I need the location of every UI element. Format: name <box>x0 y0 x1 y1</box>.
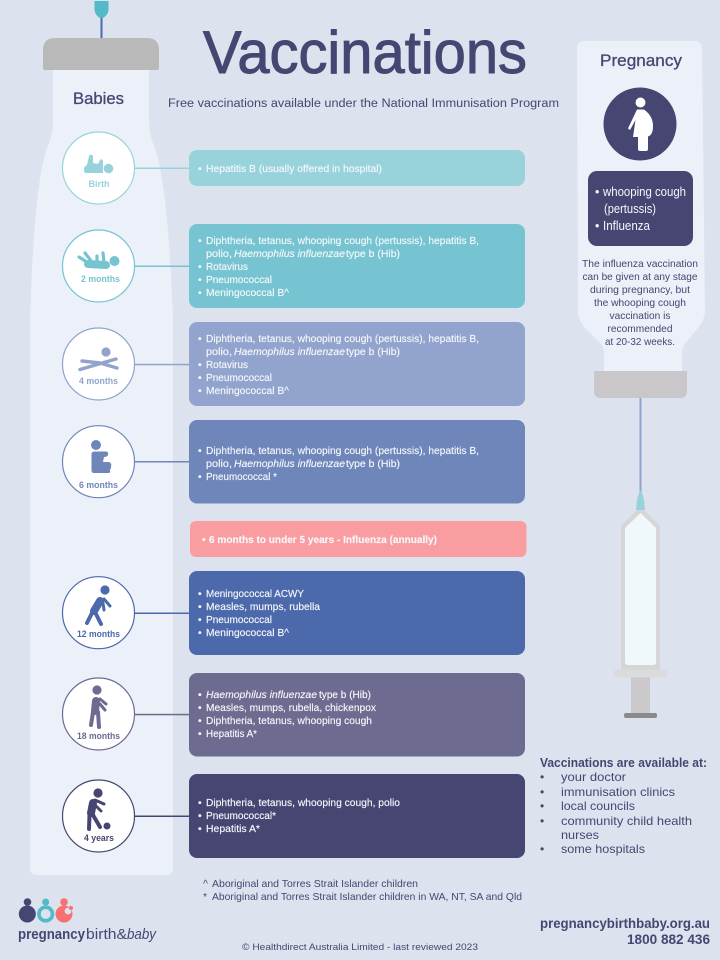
age label: 18 months <box>77 731 120 741</box>
vaccine list: Diphtheria, tetanus, whooping cough, polio <box>206 797 400 809</box>
connector <box>134 364 190 365</box>
vaccine list: type b (Hib) <box>346 458 400 470</box>
vaccine list: • <box>198 359 202 371</box>
vaccine list: type b (Hib) <box>319 689 371 701</box>
panel: influenza 6 months to under 5 years: 6 months to under 5 years - Influenza (annually) <box>209 534 437 546</box>
where to get vaccinated: nurses <box>561 828 599 842</box>
syringe hub <box>636 491 645 510</box>
pregnancy vial <box>577 41 705 398</box>
age label: 2 months <box>81 274 120 284</box>
panel: birth vaccines <box>189 150 525 186</box>
panel: pregnancy vaccines: (pertussis) <box>604 202 656 216</box>
vaccine list: • <box>198 445 202 457</box>
circle: 2 months <box>62 230 134 302</box>
logo marks <box>19 898 73 922</box>
title: Vaccinations <box>203 19 527 86</box>
icon: baby on tummy <box>80 347 117 370</box>
connector <box>134 714 190 715</box>
contact details: pregnancybirthbaby.org.au <box>540 915 710 931</box>
vaccine list: • <box>198 274 202 286</box>
pregnancy note: vaccination is <box>610 310 670 322</box>
vaccine list: Measles, mumps, rubella, chickenpox <box>206 702 377 714</box>
age label: Birth <box>88 179 110 189</box>
where to get vaccinated: Vaccinations are available at: <box>540 756 707 770</box>
vaccine list: Hepatitis A* <box>206 823 260 835</box>
icon: baby on back <box>79 253 120 266</box>
vaccine list: Diphtheria, tetanus, whooping cough <box>206 715 372 727</box>
contact details: 1800 882 436 <box>627 931 710 947</box>
row: 12 months <box>62 571 525 655</box>
vaccine list: • <box>198 235 202 247</box>
syringe <box>614 398 667 718</box>
circle: 12 months <box>62 577 134 649</box>
vaccine list: Haemophilus influenzae <box>234 458 345 470</box>
vaccine list: Rotavirus <box>206 261 248 273</box>
where to get vaccinated: your doctor <box>561 770 626 784</box>
vaccine list: Rotavirus <box>206 359 248 371</box>
logo wordmark: birth& <box>86 926 127 943</box>
needle <box>640 398 642 493</box>
vaccine list: • <box>198 261 202 273</box>
bottle cap <box>43 38 159 70</box>
age label: 4 years <box>84 833 114 843</box>
circle: 18 months <box>62 678 134 750</box>
where to get vaccinated: immunisation clinics <box>561 785 675 799</box>
footnotes: Aboriginal and Torres Strait Islander children <box>212 878 418 890</box>
panel: 18 months vaccines <box>189 673 525 756</box>
where to get vaccinated: • <box>540 814 544 828</box>
vaccine list: • <box>198 627 202 639</box>
pregnancy note: The influenza vaccination <box>582 258 698 270</box>
vaccine list: Pneumococcal* <box>206 810 276 822</box>
syringe barrel <box>621 510 660 671</box>
vaccine list: polio, <box>206 346 232 358</box>
age label: 12 months <box>77 629 120 639</box>
where to get vaccinated: • <box>540 842 544 856</box>
panel: 6 months vaccines <box>189 420 525 504</box>
vaccine list: • <box>198 823 202 835</box>
vaccine list: • <box>198 385 202 397</box>
panel: pregnancy vaccines: • <box>595 185 599 199</box>
syringe plunger rod <box>631 677 650 714</box>
vaccine list: Diphtheria, tetanus, whooping cough (pertussis), hepatitis B, <box>206 333 479 345</box>
vaccine list: type b (Hib) <box>346 346 400 358</box>
age label: 4 months <box>79 376 118 386</box>
connector <box>134 612 190 614</box>
panel: 12 months vaccines <box>189 571 525 655</box>
panel: pregnancy vaccines: whooping cough <box>602 185 686 199</box>
panel: pregnancy vaccines: • <box>595 219 599 233</box>
logo wordmark: baby <box>127 926 157 943</box>
circle: 4 months <box>62 328 134 400</box>
panel: 2 months vaccines <box>189 224 525 308</box>
vial cap <box>594 371 687 398</box>
pregnancy note: at 20-32 weeks. <box>605 336 675 348</box>
vaccine list <box>198 235 479 299</box>
subtitle: Free vaccinations available under the National Immunisation Program <box>168 98 559 110</box>
row: 18 months <box>62 673 525 756</box>
circle: birth <box>62 132 134 204</box>
vaccine list: Haemophilus influenzae <box>206 689 317 701</box>
vaccine list: polio, <box>206 248 232 260</box>
vaccine list: • <box>198 614 202 626</box>
panel: influenza 6 months to under 5 years: • <box>202 534 206 546</box>
connector <box>134 168 190 169</box>
syringe liquid <box>625 513 656 665</box>
vaccine list <box>198 445 479 483</box>
icon: newborn baby <box>84 154 113 173</box>
pregnancy note: recommended <box>608 323 673 335</box>
panel: influenza 6 months to under 5 years <box>190 521 526 557</box>
vaccine list: • <box>198 333 202 345</box>
logo wordmark <box>18 926 157 943</box>
vaccine list: Pneumococcal <box>206 274 272 286</box>
syringe flange <box>614 670 667 678</box>
vaccine list: Haemophilus influenzae <box>234 346 345 358</box>
vaccine list: • <box>198 728 202 740</box>
vaccine list: Meningococcal B^ <box>206 627 289 639</box>
vaccine list <box>198 689 377 740</box>
age label: 6 months <box>79 480 118 490</box>
vaccine list: • <box>198 287 202 299</box>
vaccine list: Hepatitis B (usually offered in hospital) <box>206 163 382 175</box>
vaccine list <box>198 797 400 835</box>
copyright: © Healthdirect Australia Limited - last reviewed 2023 <box>242 942 478 953</box>
bottle needle <box>94 1 108 39</box>
where to get vaccinated: local councils <box>561 799 635 813</box>
vaccine list: Pneumococcal <box>206 614 272 626</box>
footnotes <box>203 878 522 903</box>
vaccine list <box>198 588 320 639</box>
connector <box>134 816 190 817</box>
panel: pregnancy vaccines <box>588 171 693 246</box>
connector <box>134 461 190 462</box>
vaccine list: • <box>198 715 202 727</box>
vaccine list: Pneumococcal * <box>206 471 277 483</box>
panel: pregnancy vaccines: Influenza <box>603 219 650 233</box>
vaccine list: Hepatitis A* <box>206 728 257 740</box>
where to get vaccinated <box>540 756 707 856</box>
vaccine list: • <box>198 588 202 600</box>
vaccine list: • <box>198 601 202 613</box>
icon: sitting baby <box>91 440 111 473</box>
row: 4 months <box>62 322 525 406</box>
vaccine list: Measles, mumps, rubella <box>206 601 320 613</box>
vaccine list: • <box>198 797 202 809</box>
circle: 6 months <box>62 426 134 498</box>
pregnancy note <box>582 258 698 348</box>
footnotes: ^ <box>203 878 208 890</box>
circle: 4 years <box>62 780 134 852</box>
vaccine list: Haemophilus influenzae <box>234 248 345 260</box>
panel: 4 months vaccines <box>189 322 525 406</box>
logo <box>18 898 157 943</box>
where to get vaccinated: some hospitals <box>561 842 645 856</box>
vaccine list: Diphtheria, tetanus, whooping cough (pertussis), hepatitis B, <box>206 235 479 247</box>
row: birth <box>62 132 525 204</box>
vaccine list: Diphtheria, tetanus, whooping cough (pertussis), hepatitis B, <box>206 445 479 457</box>
vaccine list: Meningococcal B^ <box>206 385 289 397</box>
connector <box>134 266 190 267</box>
where to get vaccinated: community child health <box>561 814 692 828</box>
babies heading: Babies <box>73 90 124 108</box>
contact details <box>540 915 710 947</box>
vaccine list: Meningococcal B^ <box>206 287 289 299</box>
vaccine list: Pneumococcal <box>206 372 272 384</box>
vaccine list: • <box>198 810 202 822</box>
row: 2 months <box>62 224 525 308</box>
pregnancy note: can be given at any stage <box>582 271 698 283</box>
icon: pregnant woman <box>628 98 653 151</box>
where to get vaccinated: • <box>540 785 544 799</box>
footnotes: Aboriginal and Torres Strait Islander children in WA, NT, SA and Qld <box>212 891 522 903</box>
vaccine list: • <box>198 689 202 701</box>
vaccine list: • <box>198 702 202 714</box>
pregnancy note: during pregnancy, but <box>590 284 690 296</box>
vial body <box>577 41 705 373</box>
panel: 4 years vaccines <box>189 774 525 858</box>
vaccine list: • <box>198 471 202 483</box>
babies bottle <box>30 1 173 875</box>
vaccine list <box>198 333 479 397</box>
logo wordmark: pregnancy <box>18 926 86 943</box>
vaccine list: type b (Hib) <box>346 248 400 260</box>
syringe thumb rest <box>624 713 657 718</box>
pregnancy note: the whooping cough <box>594 297 686 309</box>
vaccine list: • <box>198 163 202 175</box>
vaccine list: Meningococcal ACWY <box>206 588 304 600</box>
row: 6 months <box>62 420 525 504</box>
vaccine list: polio, <box>206 458 232 470</box>
footnotes: * <box>203 891 207 903</box>
icon: toddler walking <box>87 585 110 624</box>
where to get vaccinated: • <box>540 799 544 813</box>
where to get vaccinated: • <box>540 770 544 784</box>
vaccine list: • <box>198 372 202 384</box>
bottle body <box>30 70 173 875</box>
icon: toddler standing <box>91 685 106 727</box>
row: 4 years <box>62 774 525 858</box>
pregnancy heading: Pregnancy <box>600 52 683 70</box>
circle: pregnant woman <box>604 88 676 160</box>
icon: child kicking ball <box>89 788 110 830</box>
